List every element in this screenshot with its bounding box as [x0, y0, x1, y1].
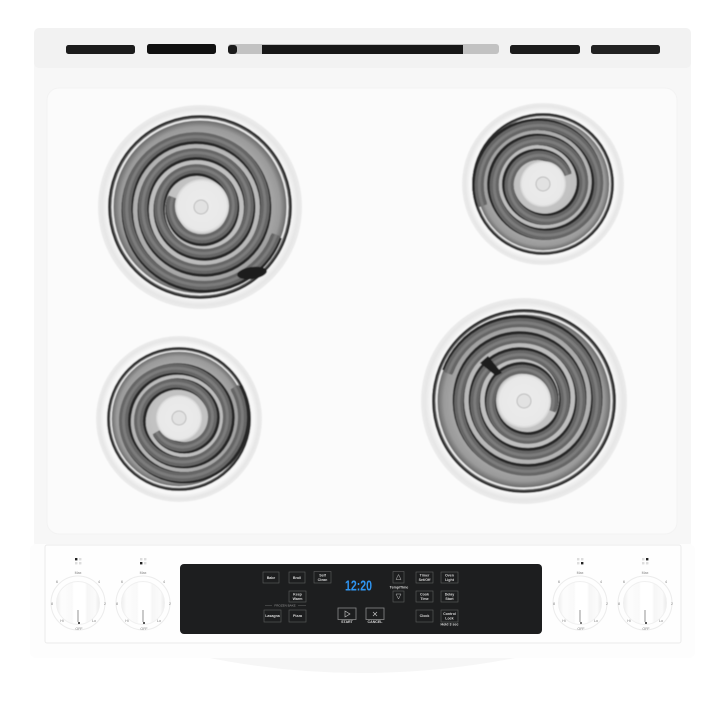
- knob 1: Max: [75, 571, 82, 575]
- knob 4: 6: [623, 580, 625, 584]
- button: Oven Light: [441, 572, 458, 583]
- knob 1: Lo: [92, 619, 96, 623]
- knob 4: 4: [665, 580, 667, 584]
- button: Lasagna: Lasagna: [265, 614, 281, 618]
- burner: front left small: [96, 336, 266, 502]
- button: Oven Light: Oven: [445, 574, 454, 578]
- burner: rear left large: [98, 105, 302, 309]
- knob 1: OFF: [75, 627, 83, 631]
- knob 3: Lo: [594, 619, 598, 623]
- knob 3: Hi: [562, 619, 566, 623]
- button: Control Lock: Control: [443, 612, 456, 616]
- knob 4: Max: [642, 571, 649, 575]
- label: Frozen Bake: FROZEN BAKE: [274, 604, 296, 608]
- button: Delay Start: [441, 591, 458, 602]
- button: Cook Time: Time: [420, 597, 429, 601]
- element indicator: [577, 558, 583, 564]
- knob 1: 6: [56, 580, 58, 584]
- button: Cook Time: Cook: [420, 592, 429, 596]
- element indicator: [642, 558, 648, 564]
- lower front lip: [200, 656, 525, 673]
- knob 1: 8: [51, 602, 53, 606]
- knob 4: Lo: [659, 619, 663, 623]
- burner: rear right small: [461, 103, 624, 265]
- knob 3: OFF: [577, 627, 585, 631]
- button: Timer Set/Off: Timer: [420, 574, 430, 578]
- button: Clock: Clock: [420, 614, 429, 618]
- knob 2: 4: [163, 580, 165, 584]
- button: Self Clean: Self: [319, 574, 327, 578]
- button: Pizza: Pizza: [293, 614, 303, 618]
- knob 3: Max: [577, 571, 584, 575]
- cooktop well: [47, 88, 677, 534]
- vent slot 2: [147, 44, 216, 54]
- button: temp down: [393, 591, 404, 602]
- knob 4: 2: [671, 602, 673, 606]
- knob 4: 8: [618, 602, 620, 606]
- button: Start: START: [341, 620, 354, 624]
- knob 2: Hi: [125, 619, 129, 623]
- knob 2: Max: [140, 571, 147, 575]
- vent slot 3: [510, 45, 580, 54]
- label: Frozen Bake: [265, 604, 306, 608]
- button: Control Lock: Hold 3 sec: [441, 622, 458, 626]
- button: Pizza: [289, 610, 306, 622]
- button: Cook Time: [416, 591, 433, 602]
- button: Self Clean: [314, 572, 331, 583]
- rear vent strip: [34, 28, 691, 68]
- control panel: [180, 564, 542, 634]
- button: Keep Warm: [289, 591, 306, 602]
- knob 4: OFF: [642, 627, 650, 631]
- control console: [30, 544, 695, 658]
- button: Bake: [263, 572, 279, 583]
- knob 4: [618, 558, 673, 631]
- button: temp up: [393, 572, 404, 583]
- knob 1: 2: [104, 602, 106, 606]
- knob 3: 4: [600, 580, 602, 584]
- button: Self Clean: Clean: [318, 578, 327, 582]
- button: Lasagna: [264, 610, 281, 622]
- button: Control Lock: Lock: [445, 616, 454, 620]
- button: Bake: Bake: [267, 576, 275, 580]
- knob 2: 8: [116, 602, 118, 606]
- knob 2: 6: [121, 580, 123, 584]
- knob 3: 6: [558, 580, 560, 584]
- button: Oven Light: Light: [445, 578, 455, 582]
- knob 2: [116, 558, 171, 631]
- knob 2: 2: [169, 602, 171, 606]
- knob 1: 4: [98, 580, 100, 584]
- knob 4: Hi: [627, 619, 631, 623]
- button: Timer Set/Off: Set/Off: [419, 578, 431, 582]
- knob 1: [51, 558, 106, 631]
- button: Broil: [289, 572, 305, 583]
- cooktop body: [34, 28, 691, 548]
- button: Start: [338, 608, 356, 624]
- vent slot 4: [591, 45, 660, 54]
- button: Control Lock: [441, 610, 458, 626]
- knob 1: Hi: [60, 619, 64, 623]
- button: Cancel: CANCEL: [368, 620, 383, 624]
- knob 3: 8: [553, 602, 555, 606]
- button: Cancel: [366, 608, 384, 624]
- button: Keep Warm: Keep: [293, 592, 303, 596]
- button: Keep Warm: Warm: [293, 597, 302, 601]
- button: Timer Set/Off: [416, 572, 433, 583]
- knob 2: OFF: [140, 627, 148, 631]
- knob 3: 2: [606, 602, 608, 606]
- element indicator: [140, 558, 146, 564]
- button: Broil: Broil: [293, 576, 301, 580]
- clock display: 12:20: [345, 578, 372, 594]
- button: Clock: [416, 610, 433, 622]
- centre vent: [228, 44, 499, 54]
- vent slot 1: [66, 45, 135, 54]
- label: Temp/Time: Temp/Time: [390, 586, 408, 590]
- element indicator: [75, 558, 81, 564]
- knob 2: Lo: [157, 619, 161, 623]
- button: Delay Start: Delay: [445, 592, 454, 596]
- button: Delay Start: Start: [445, 597, 454, 601]
- knob 3: [553, 558, 608, 631]
- burner: front right large: [421, 298, 627, 504]
